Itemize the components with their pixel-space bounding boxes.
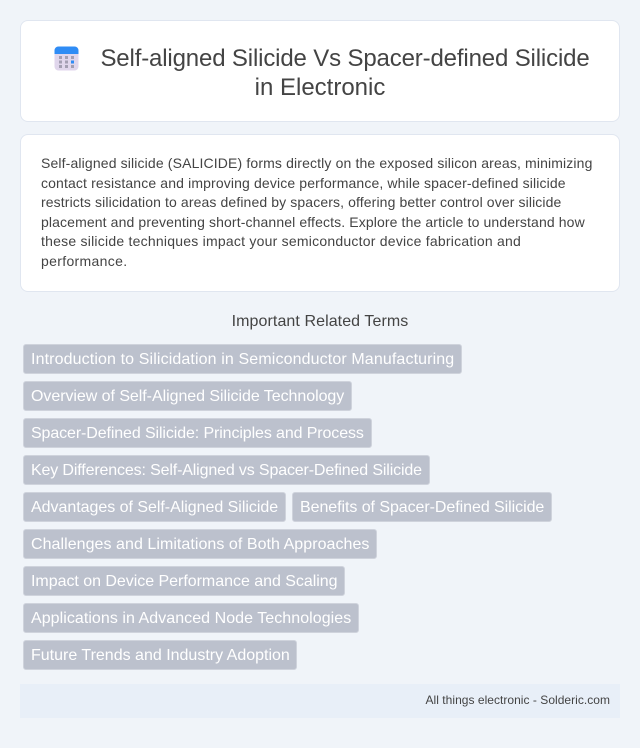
tag 7 xyxy=(23,529,377,559)
related terms tags xyxy=(23,344,552,670)
header panel xyxy=(20,20,620,122)
description text: contact resistance and improving device performance, while spacer-defined silicide xyxy=(41,174,566,190)
title: Self-aligned Silicide Vs Spacer-defined Silicide xyxy=(100,45,590,72)
tag 5: Advantages of Self-Aligned Silicide xyxy=(31,499,278,516)
tag 5 xyxy=(23,492,286,522)
description text: Self-aligned silicide (SALICIDE) forms directly on the exposed silicon areas, minimizing xyxy=(41,155,593,171)
tag 2: Overview of Self-Aligned Silicide Technology xyxy=(31,388,344,405)
description text: placement and preventing short-channel effects. Explore the article to understand how xyxy=(41,214,585,230)
footer text: All things electronic - Solderic.com xyxy=(426,693,610,707)
tag 3 xyxy=(23,418,372,448)
title: in Electronic xyxy=(255,74,385,101)
footer bar xyxy=(20,684,620,718)
tag 3: Spacer-Defined Silicide: Principles and Process xyxy=(31,425,364,442)
description text: these silicide techniques impact your semiconductor device fabrication and xyxy=(41,233,521,249)
description text: performance. xyxy=(41,252,127,268)
icon: calendar xyxy=(54,46,78,70)
tag 6: Benefits of Spacer-Defined Silicide xyxy=(300,499,544,516)
tag 10 xyxy=(23,640,297,670)
section heading: Important Related Terms xyxy=(232,313,408,330)
tag 7: Challenges and Limitations of Both Approaches xyxy=(31,536,369,553)
tag 4 xyxy=(23,455,430,485)
tag 10: Future Trends and Industry Adoption xyxy=(31,647,290,664)
tag 9: Applications in Advanced Node Technologies xyxy=(31,610,351,627)
tag 2 xyxy=(23,381,352,411)
description text xyxy=(41,155,593,269)
tag 8: Impact on Device Performance and Scaling xyxy=(31,573,338,590)
tag 4: Key Differences: Self-Aligned vs Spacer-Defined Silicide xyxy=(31,462,422,479)
tag 9 xyxy=(23,603,359,633)
description text: restricts silicidation to areas defined by spacers, offering better control over silicide xyxy=(41,194,561,210)
tag 1: Introduction to Silicidation in Semiconductor Manufacturing xyxy=(31,351,454,368)
title xyxy=(100,45,590,101)
tag 6 xyxy=(292,492,552,522)
tag 1 xyxy=(23,344,462,374)
description panel xyxy=(20,134,620,292)
tag 8 xyxy=(23,566,345,596)
